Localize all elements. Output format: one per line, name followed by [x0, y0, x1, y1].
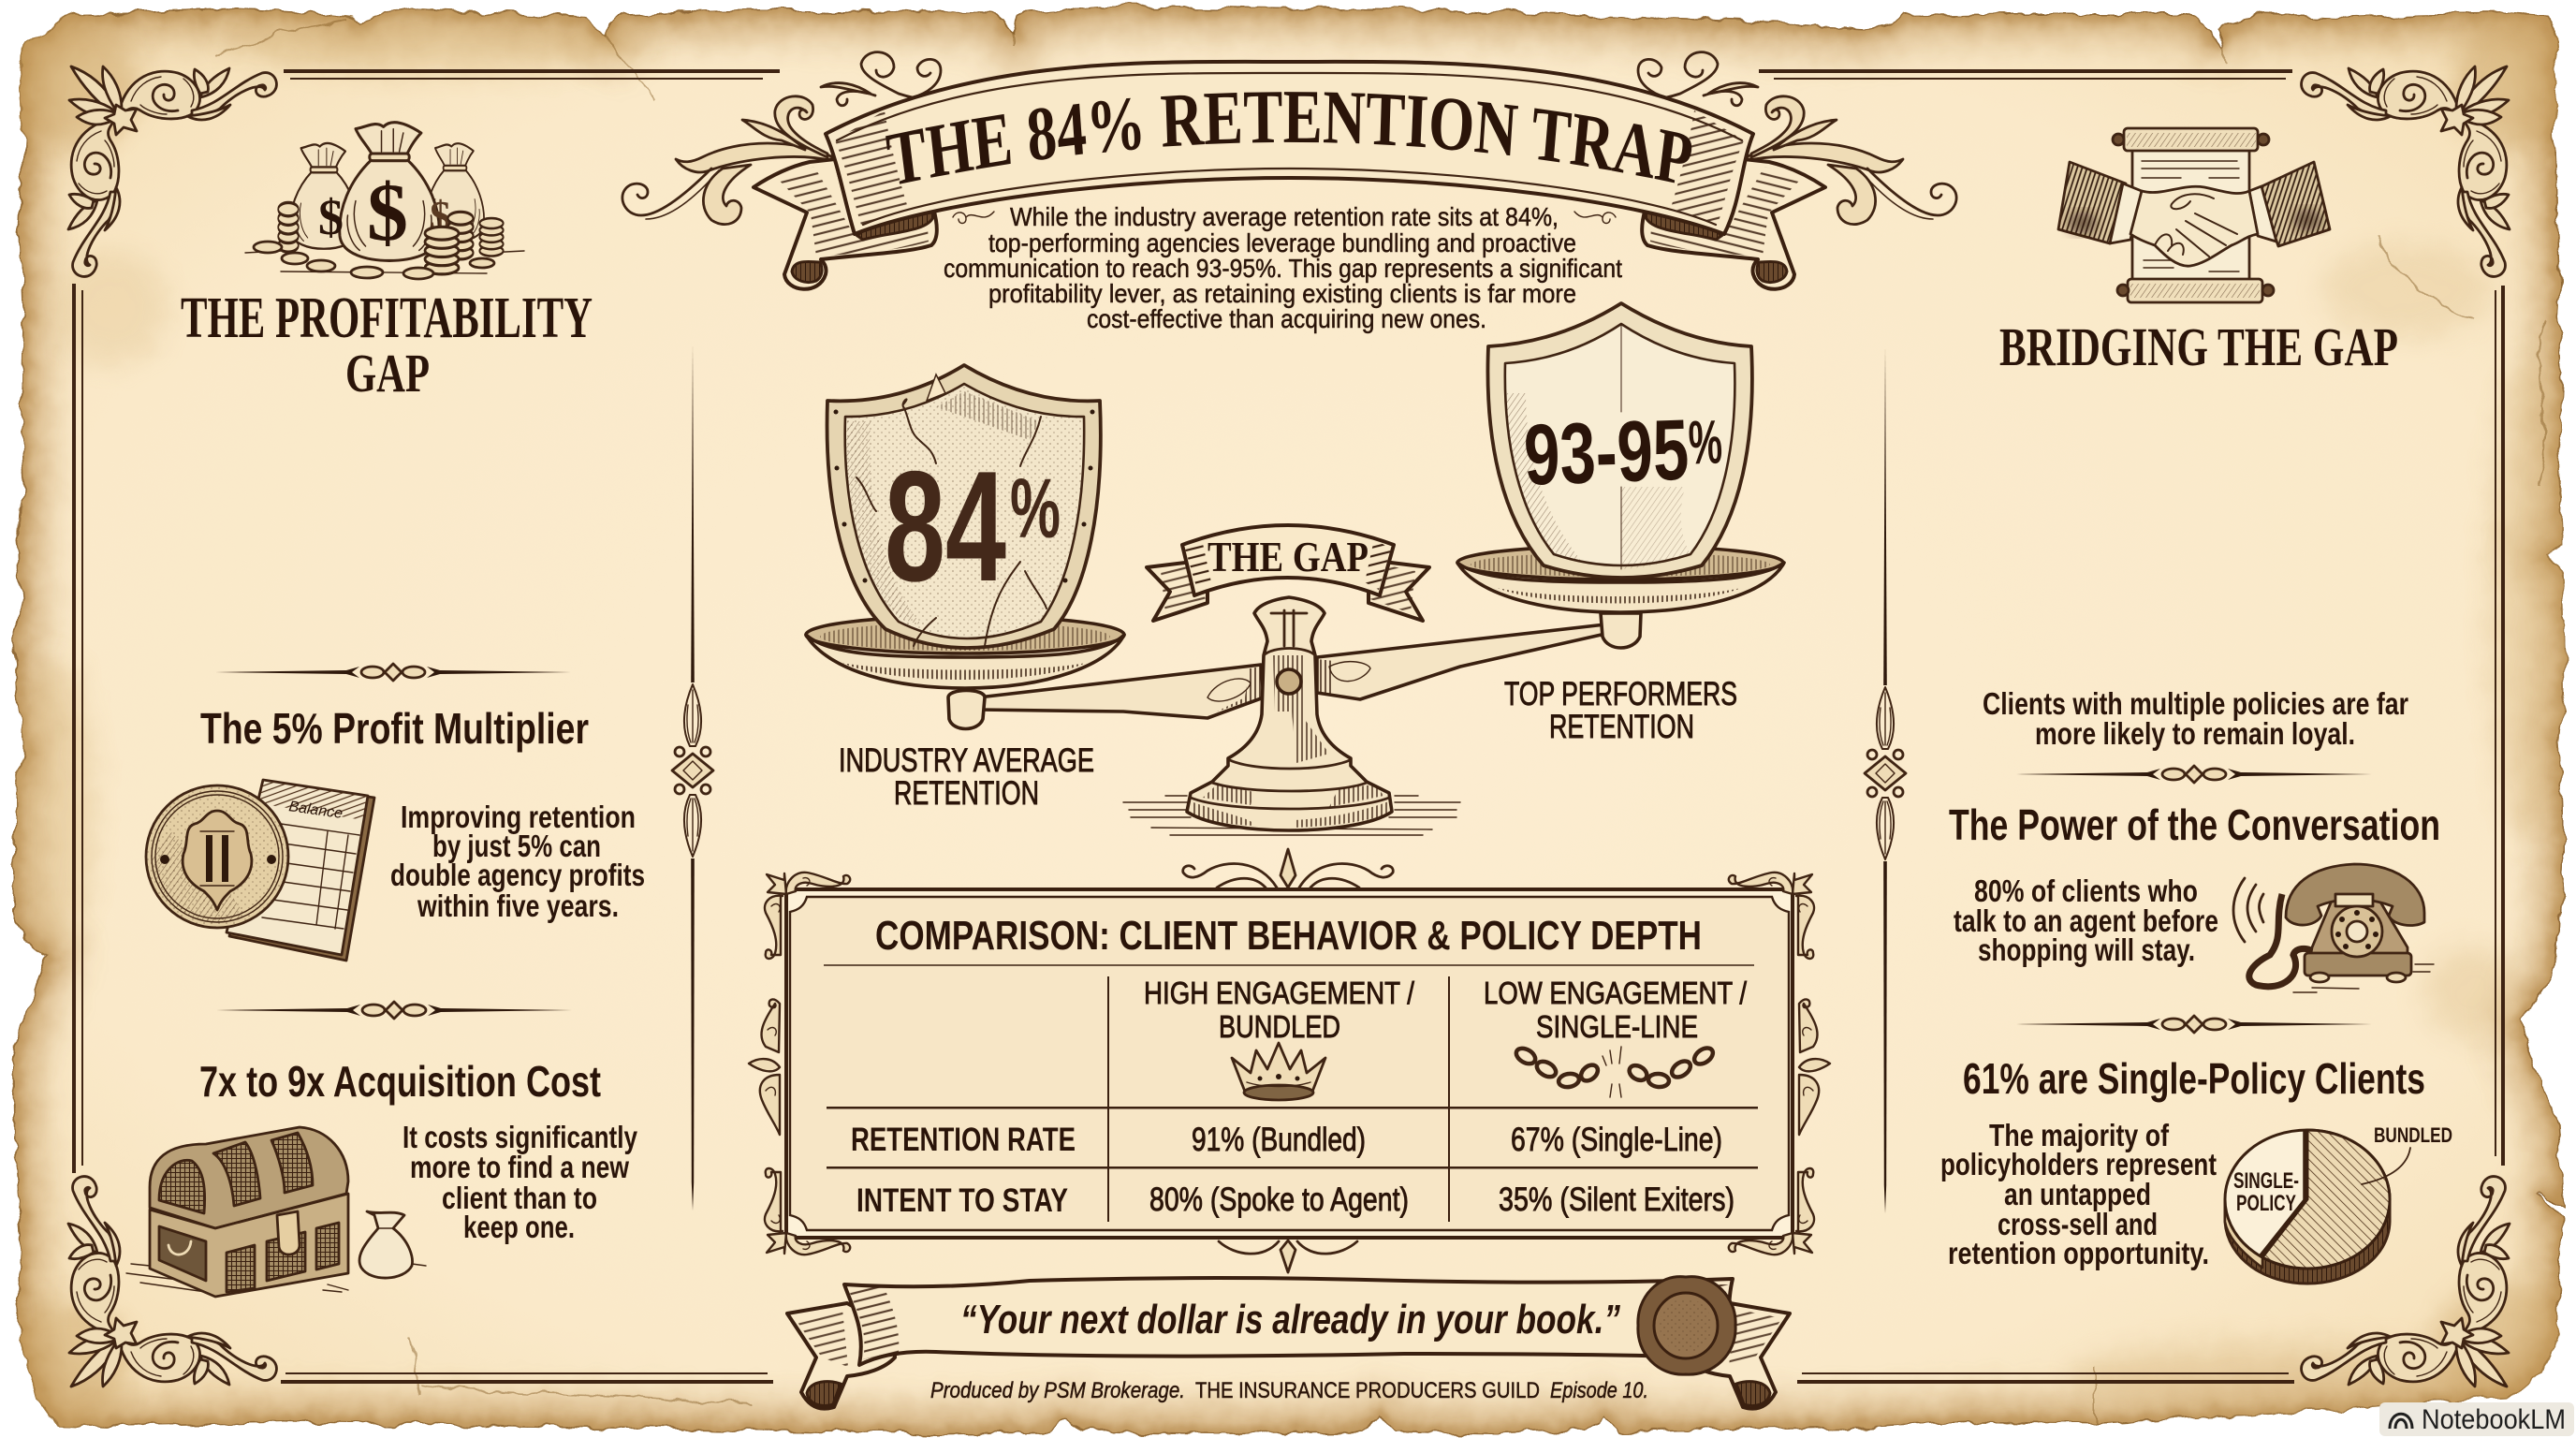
panel: comparison table [749, 849, 1830, 1272]
quote text: “Your next dollar is already in your book.” [960, 1297, 1620, 1343]
text: improving retention: Improving retention [401, 800, 636, 834]
row: retention rate: 67% (Single-Line) [1511, 1122, 1722, 1158]
production credit: Episode 10. [1550, 1378, 1648, 1403]
column header: low engagement [1484, 976, 1748, 1044]
icon: coin and ledger: Balance [287, 799, 344, 822]
pie chart: single-policy vs bundled: BUNDLED [2374, 1123, 2452, 1147]
intro paragraph: top-performing agencies leverage bundling and proactive [988, 228, 1576, 257]
column divider: right [1865, 346, 1906, 1213]
label: industry average retention: RETENTION [894, 775, 1039, 812]
text: it costs significantly: client than to [442, 1181, 597, 1215]
text: majority of policyholders: The majority of [1989, 1118, 2170, 1152]
icon: money bags and coins: $ [367, 168, 408, 258]
text: improving retention: within five years. [417, 888, 619, 923]
icon: handshake over scroll [2058, 128, 2330, 302]
title text: THE 84% RETENTION TRAP [886, 92, 1692, 184]
icon: coin and ledger [146, 780, 374, 961]
text: multiple policies: Clients with multiple policies are far [1983, 686, 2408, 721]
row: retention rate: 91% (Bundled) [1192, 1122, 1366, 1158]
shield: 93-95% top performers: 93-95 [1522, 403, 1690, 504]
text: multiple policies: more likely to remain loyal. [2035, 716, 2355, 751]
text: majority of policyholders: policyholders represent [1940, 1147, 2217, 1181]
pie chart: single-policy vs bundled: SINGLE- [2233, 1168, 2299, 1194]
corner ornament: bottom left [68, 1177, 276, 1387]
table title: COMPARISON: CLIENT BEHAVIOR & POLICY DEPTH [875, 913, 1702, 959]
shield: 84% industry average: % [1010, 462, 1061, 556]
ribbon body [826, 62, 1753, 234]
text: improving retention [390, 800, 645, 923]
text: it costs significantly: keep one. [463, 1210, 575, 1244]
the gap banner: THE GAP [1208, 533, 1368, 580]
ribbon tails [787, 1303, 1790, 1409]
label: top performers retention: TOP PERFORMERS [1504, 676, 1737, 712]
corner ornament: bottom right [2302, 1177, 2510, 1387]
heading: 5% profit multiplier: The 5% Profit Multiplier [200, 704, 589, 753]
table panel [786, 889, 1793, 1238]
scale beam: left arm [978, 665, 1264, 718]
icon: treasure chest and pouch [126, 1127, 426, 1297]
panel: bridging the gap [1940, 128, 2452, 1284]
left pan back [806, 616, 1124, 653]
text: improving retention: double agency profits [390, 858, 645, 892]
heading: the profitability gap [181, 286, 593, 404]
divider [215, 664, 571, 681]
wax seal [1638, 1277, 1735, 1374]
icon: money bags and coins: $ [318, 189, 344, 245]
column divider: left [672, 344, 713, 1211]
icon: crown [1232, 1043, 1325, 1100]
intro paragraph: communication to reach 93-95%. This gap represents a significant [944, 254, 1622, 283]
icon: broken chain [1514, 1045, 1716, 1097]
column header: high engagement: HIGH ENGAGEMENT / [1144, 976, 1415, 1010]
heading: single-policy clients: 61% are Single-Policy Clients [1963, 1054, 2425, 1103]
the gap banner [1147, 525, 1429, 621]
pie chart: single-policy vs bundled: POLICY [2236, 1191, 2296, 1216]
production credit: Produced by PSM Brokerage. [930, 1378, 1185, 1403]
text: improving retention: by just 5% can [432, 829, 601, 863]
icon: rotary telephone [2233, 864, 2434, 992]
shield: 93-95% top performers [1487, 303, 1752, 578]
pie chart: single-policy vs bundled [2225, 1123, 2452, 1284]
icon: money bags and coins: $ [430, 192, 451, 240]
right knob [1601, 613, 1641, 648]
scale shadow [1123, 796, 1460, 835]
scale illustration [806, 303, 1784, 835]
text: majority of policyholders: an untapped [2004, 1177, 2151, 1211]
intro paragraph: While the industry average retention rate sits at 84%, [1010, 202, 1559, 231]
right pan front [1457, 563, 1784, 612]
heading: power of the conversation: The Power of the Conversation [1949, 800, 2440, 849]
icon: money bags and coins [245, 123, 524, 279]
row: retention rate: RETENTION RATE [851, 1122, 1076, 1158]
text: majority of policyholders: cross-sell and [1998, 1207, 2158, 1241]
text: majority of policyholders [1940, 1118, 2217, 1270]
column header: high engagement [1144, 976, 1415, 1044]
ribbon body [844, 1278, 1733, 1365]
panel: the profitability gap [126, 123, 645, 1297]
ribbon tails [754, 159, 1825, 289]
divider [2016, 1016, 2372, 1033]
label: top performers retention [1504, 676, 1737, 745]
scale stand [1187, 597, 1392, 830]
text: 80 percent of clients: 80% of clients who [1974, 873, 2198, 908]
intro paragraph: cost-effective than acquiring new ones. [1087, 304, 1486, 333]
column header: low engagement: LOW ENGAGEMENT / [1484, 976, 1748, 1010]
heading: acquisition cost: 7x to 9x Acquisition Cost [199, 1057, 601, 1106]
divider [2016, 766, 2372, 783]
title banner [622, 51, 2320, 327]
label: industry average retention [839, 742, 1094, 812]
heading: bridging the gap: BRIDGING THE GAP [1999, 316, 2398, 377]
row: intent to stay: 35% (Silent Exiters) [1499, 1181, 1734, 1218]
shield: 84% industry average [827, 365, 1101, 648]
table frame ornaments [749, 849, 1830, 1272]
row: intent to stay: INTENT TO STAY [856, 1182, 1068, 1219]
column header: high engagement: BUNDLED [1219, 1009, 1340, 1044]
intro paragraph [944, 202, 1622, 333]
label: industry average retention: INDUSTRY AVERAGE [839, 742, 1094, 779]
row: retention rate [851, 1122, 1722, 1158]
flourish: left of banner [622, 52, 964, 225]
label: top performers retention: RETENTION [1549, 709, 1694, 745]
shield: 93-95% top performers: % [1687, 406, 1723, 477]
row: intent to stay [856, 1181, 1734, 1219]
text: 80 percent of clients: shopping will stay. [1978, 932, 2195, 967]
corner ornament: top left [68, 66, 276, 276]
table grid [824, 964, 1758, 1222]
text: majority of policyholders: retention opportunity. [1948, 1236, 2209, 1270]
row: intent to stay: 80% (Spoke to Agent) [1149, 1181, 1409, 1218]
intro paragraph: profitability lever, as retaining existing clients is far more [988, 279, 1576, 308]
text: it costs significantly: more to find a new [410, 1150, 629, 1184]
divider [216, 1002, 572, 1019]
text: 80 percent of clients [1954, 873, 2218, 967]
corner ornament: top right [2302, 66, 2510, 276]
text: it costs significantly [402, 1120, 638, 1244]
left knob [948, 691, 985, 728]
quote banner [787, 1277, 1790, 1409]
text: 80 percent of clients: talk to an agent before [1954, 903, 2218, 938]
scale beam: right arm [1317, 624, 1605, 699]
heading: the profitability gap: THE PROFITABILITY [181, 286, 593, 350]
text: it costs significantly: It costs significantly [402, 1120, 638, 1154]
flourish: right of banner [1615, 52, 1956, 225]
left pan front [806, 635, 1124, 688]
text: multiple policies [1983, 686, 2408, 751]
shield: 84% industry average: 84 [885, 438, 1006, 614]
right pan back [1457, 546, 1783, 580]
column header: low engagement: SINGLE-LINE [1536, 1009, 1698, 1044]
heading: the profitability gap: GAP [345, 343, 430, 404]
production credit [930, 1378, 1648, 1403]
production credit: THE INSURANCE PRODUCERS GUILD [1195, 1378, 1540, 1403]
